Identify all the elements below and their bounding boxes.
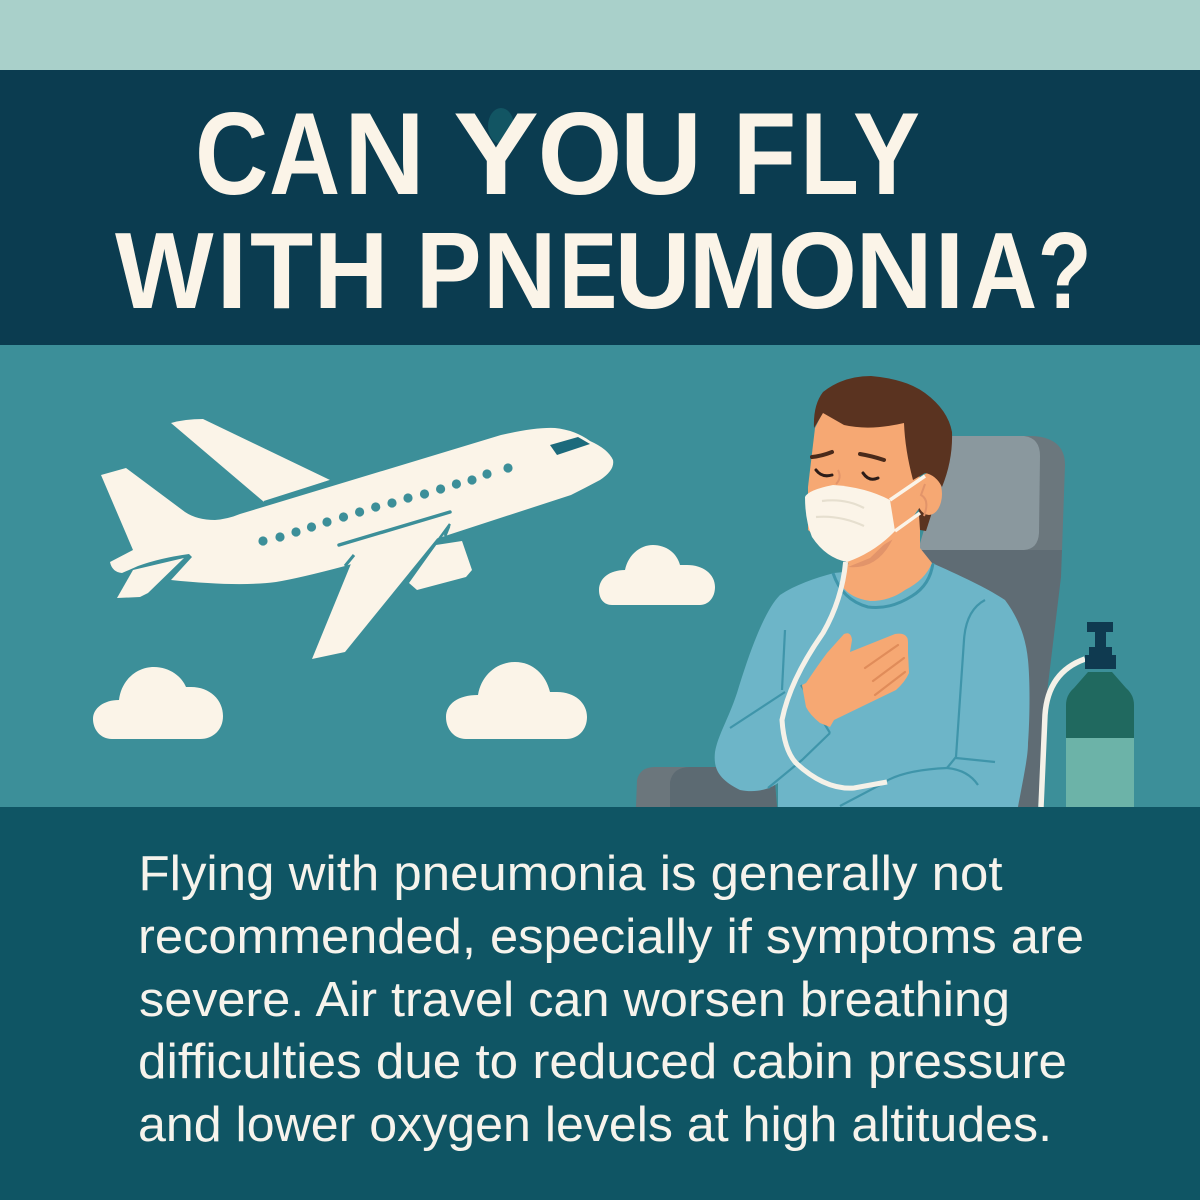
title line 2: W (115, 210, 214, 331)
icon: cloud right (599, 545, 715, 605)
title line 2: T (250, 210, 313, 331)
title line 2: P (416, 210, 482, 331)
title line 1: N (344, 88, 425, 219)
illustration panel (0, 345, 1200, 807)
body text: recommended, especially if symptoms are (138, 909, 1084, 964)
hair behind ear (918, 500, 936, 531)
body text: Flying with pneumonia is generally not (138, 846, 1003, 901)
sweater (715, 563, 1030, 807)
title line 1: F (733, 88, 796, 219)
body text: difficulties due to reduced cabin pressure (138, 1034, 1067, 1089)
icon: cloud left (93, 667, 223, 739)
description panel (0, 807, 1200, 1200)
title line 1: A (269, 88, 340, 219)
face mask (805, 485, 895, 562)
title line 2: U (615, 210, 690, 331)
cockpit window (550, 437, 590, 455)
body text: severe. Air travel can worsen breathing (139, 972, 1010, 1027)
icon: airplane seat (636, 436, 1065, 807)
body text: and lower oxygen levels at high altitudes. (138, 1097, 1052, 1152)
hair (814, 376, 952, 487)
title line 1: Y (453, 88, 539, 219)
ear (916, 473, 942, 515)
title line 2: O (778, 210, 857, 331)
icon: airplane (101, 419, 613, 659)
title panel (0, 70, 1200, 345)
eyebrows (812, 452, 884, 460)
hand on chest (802, 633, 909, 727)
title line 1: O (538, 88, 622, 219)
title line 1: U (620, 88, 702, 219)
top band (0, 0, 1200, 70)
title line 1: Y (853, 88, 920, 219)
title line 2: N (483, 210, 556, 331)
title line 2: M (688, 210, 779, 331)
title line 2: E (559, 210, 617, 331)
closed eyes (816, 470, 878, 479)
icon: oxygen tank (1041, 622, 1134, 807)
title line 2: ? (1038, 210, 1092, 331)
title line 2: N (856, 210, 933, 331)
title line 2: A (970, 210, 1037, 331)
body text (138, 846, 1084, 1152)
title line 2: I (216, 210, 248, 331)
icon: cloud centre (446, 662, 587, 739)
mask straps (890, 476, 925, 531)
title line 1: L (800, 88, 859, 219)
oxygen tube (782, 562, 887, 788)
title line 2: I (934, 210, 964, 331)
face (808, 412, 925, 565)
cabin windows (258, 463, 513, 546)
title line 2: H (314, 210, 388, 331)
neck (842, 515, 932, 601)
icon: person wearing mask (715, 376, 1030, 807)
title line 1: C (195, 88, 268, 219)
